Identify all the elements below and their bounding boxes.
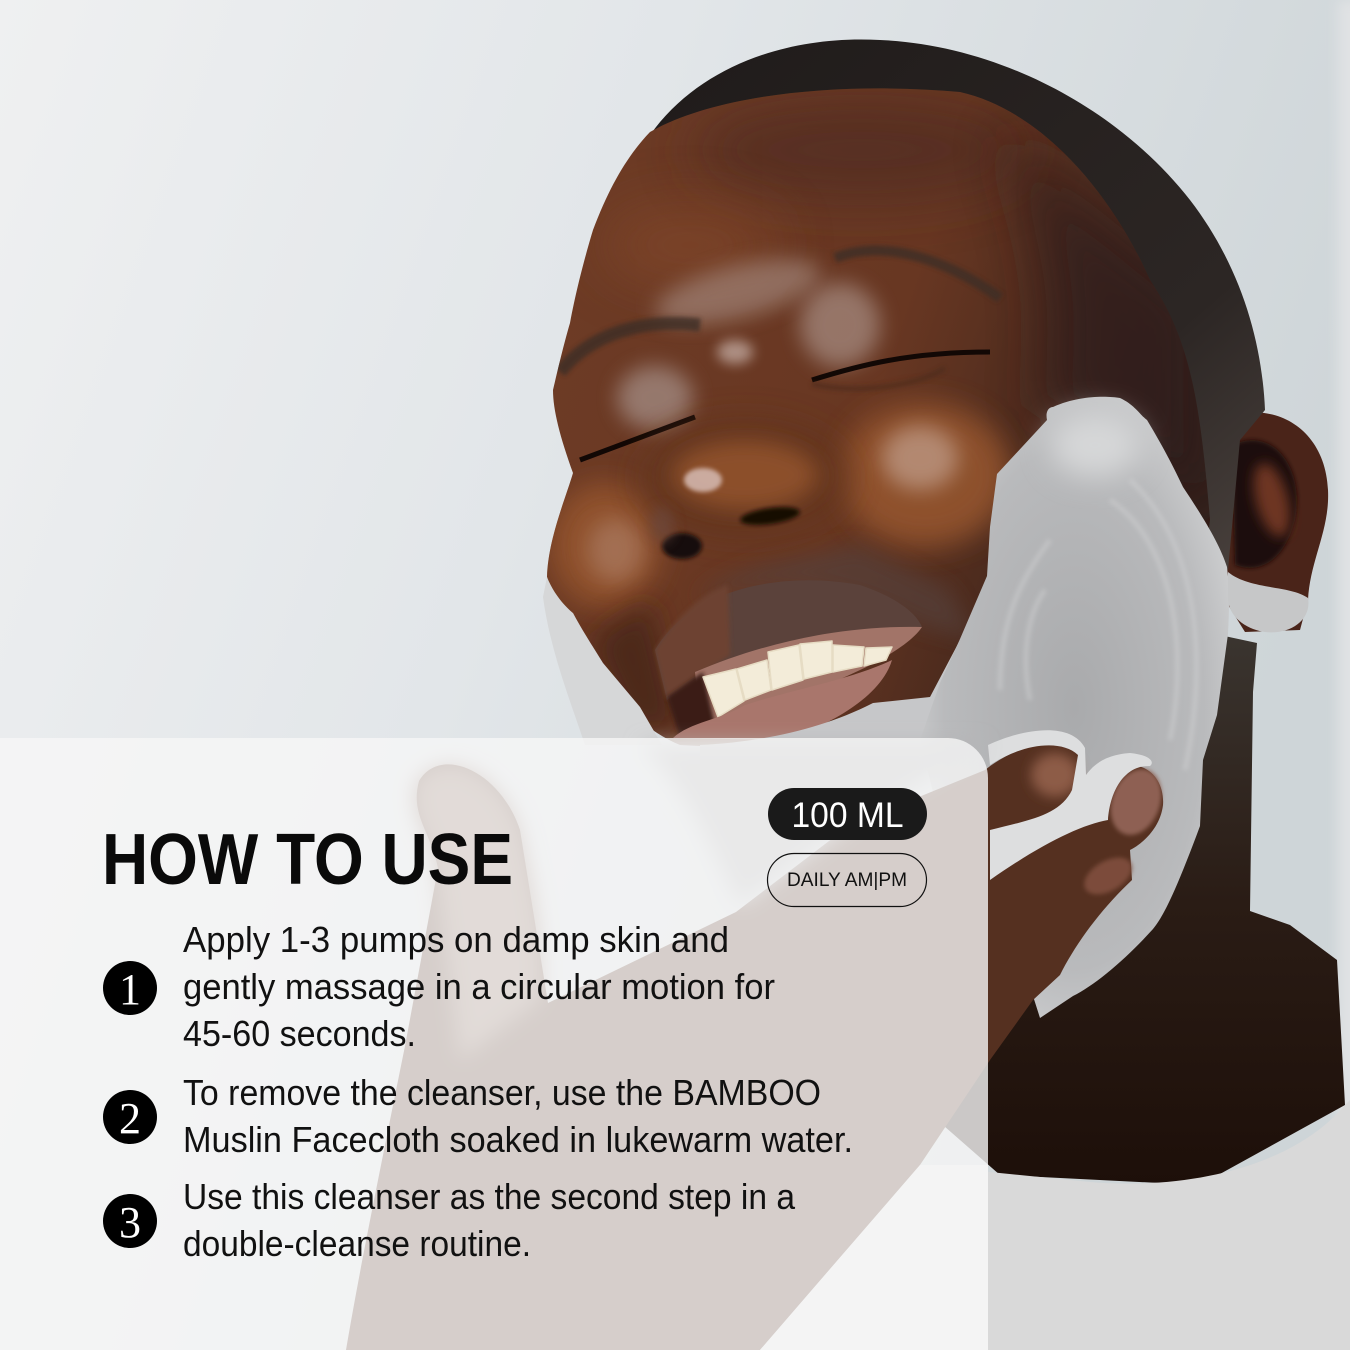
icon: number 3: 3 bbox=[119, 1198, 141, 1247]
hair bbox=[650, 39, 1265, 570]
step 1 text bbox=[183, 919, 775, 1054]
step 1 bbox=[103, 919, 775, 1054]
icon: number 2: 2 bbox=[119, 1094, 141, 1143]
foam on ear bbox=[1228, 572, 1308, 632]
hand bbox=[346, 744, 1163, 1350]
nose bbox=[646, 414, 858, 504]
foam chin left bbox=[543, 577, 662, 745]
cheek glow bbox=[840, 403, 1010, 547]
heading: HOW TO USE bbox=[102, 820, 513, 900]
icon: number 1 bbox=[103, 961, 157, 1015]
foam on cheek bbox=[920, 397, 1229, 1018]
step 2 text: To remove the cleanser, use the BAMBOO bbox=[183, 1072, 821, 1113]
upper lip bbox=[655, 580, 922, 700]
step 3 text: Use this cleanser as the second step in a bbox=[183, 1176, 796, 1217]
face bbox=[547, 88, 1210, 760]
step 3 text bbox=[183, 1176, 796, 1264]
step 2 text: Muslin Facecloth soaked in lukewarm water. bbox=[183, 1119, 853, 1160]
neck bbox=[800, 620, 1345, 1185]
teeth bbox=[703, 641, 892, 717]
icon: number 2 bbox=[103, 1090, 157, 1144]
eyes bbox=[580, 417, 695, 460]
step 3 bbox=[103, 1176, 796, 1264]
step 2 text bbox=[183, 1072, 853, 1160]
step 1 text: gently massage in a circular motion for bbox=[183, 966, 775, 1007]
shirt bbox=[760, 1100, 1350, 1350]
shirt under panel bbox=[760, 1165, 988, 1350]
icon: number 3 bbox=[103, 1194, 157, 1248]
lower lip bbox=[673, 660, 892, 740]
badge: daily am pm: DAILY AM|PM bbox=[787, 870, 907, 891]
icon: number 1: 1 bbox=[119, 965, 141, 1014]
panel: instructions bbox=[0, 738, 988, 1350]
step 1 text: Apply 1-3 pumps on damp skin and bbox=[183, 919, 729, 960]
finger nails bbox=[1031, 753, 1079, 797]
badge: daily am pm bbox=[768, 854, 926, 906]
foam under chin bbox=[700, 640, 1020, 770]
step 1 text: 45-60 seconds. bbox=[183, 1013, 416, 1054]
mustache stubble bbox=[730, 545, 967, 636]
brow and eyelid sheen bbox=[649, 246, 827, 338]
badge: 100 ML bbox=[768, 788, 927, 840]
gum and mouth bbox=[695, 627, 922, 725]
thumb highlight under panel bbox=[414, 766, 541, 1060]
step 3 text: double-cleanse routine. bbox=[183, 1223, 531, 1264]
foam under panel bbox=[640, 745, 985, 905]
badge: 100 ML: 100 ML bbox=[792, 796, 904, 835]
eyebrows bbox=[560, 323, 700, 372]
foam between fingers bbox=[988, 730, 1152, 880]
facial shading and features bbox=[550, 100, 1210, 730]
step 2 bbox=[103, 1072, 853, 1160]
ear bbox=[1215, 413, 1328, 632]
